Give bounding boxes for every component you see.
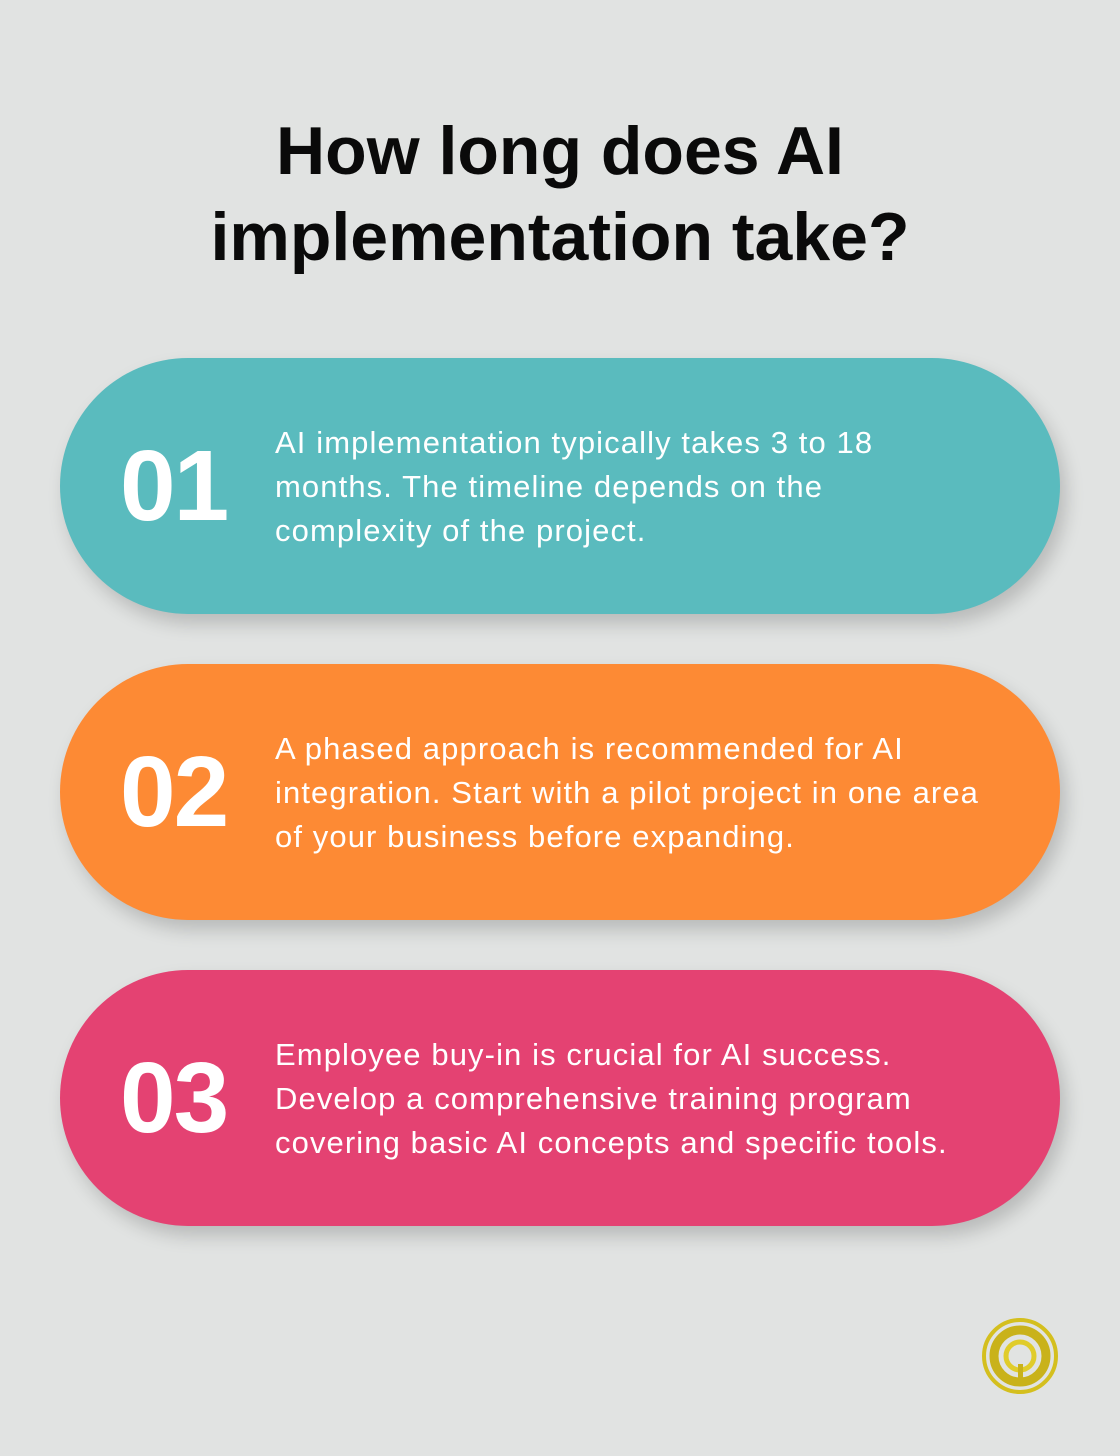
text 01	[275, 425, 873, 548]
title	[210, 113, 910, 275]
text 03: Employee buy-in is crucial for AI success.	[275, 1037, 891, 1072]
number 02: 02	[120, 736, 227, 848]
text 02	[275, 731, 979, 854]
text 03: covering basic AI concepts and specific tools.	[275, 1125, 948, 1160]
text 02: of your business before expanding.	[275, 819, 795, 854]
text 01: AI implementation typically takes 3 to 18	[275, 425, 873, 460]
number 03: 03	[120, 1042, 227, 1154]
number 01: 01	[120, 430, 227, 542]
icon: logo	[982, 1318, 1058, 1394]
text 03: Develop a comprehensive training program	[275, 1081, 912, 1116]
panel: step 02	[60, 664, 1060, 920]
text 03	[275, 1037, 948, 1160]
panel: step 03	[60, 970, 1060, 1226]
text 01: complexity of the project.	[275, 513, 646, 548]
text 02: integration. Start with a pilot project in one area	[275, 775, 979, 810]
text 01: months. The timeline depends on the	[275, 469, 823, 504]
title: How long does AI	[276, 113, 844, 189]
text 02: A phased approach is recommended for AI	[275, 731, 904, 766]
title: implementation take?	[210, 199, 910, 275]
panel: step 01	[60, 358, 1060, 614]
